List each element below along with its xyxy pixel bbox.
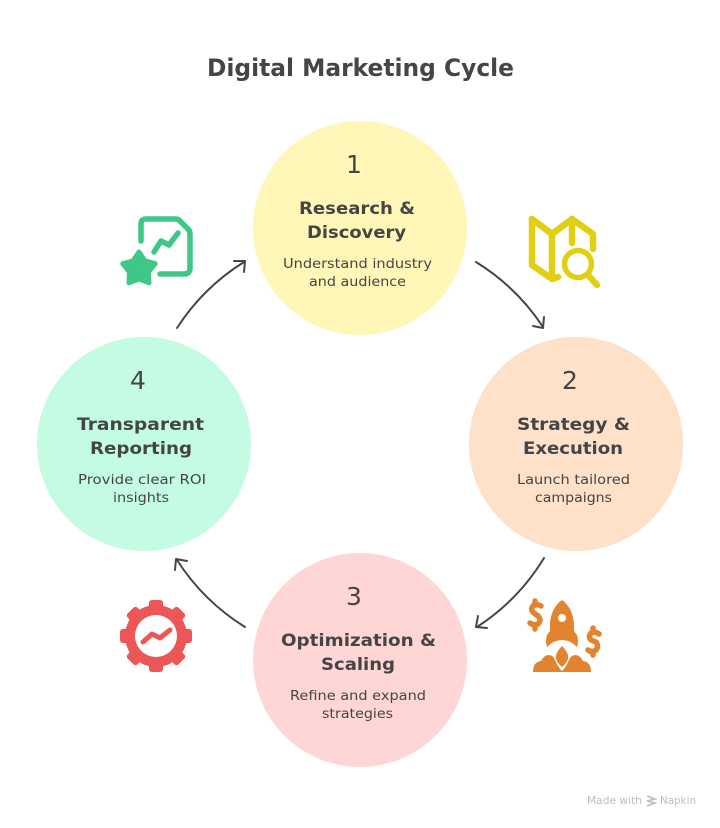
panel: step 4 transparent reporting: Transparent <box>77 415 204 435</box>
arrow: step 1 to step 2 <box>476 262 544 328</box>
panel: step 2 strategy and execution: campaigns <box>535 491 612 506</box>
icon: rocket with dollars <box>530 600 599 672</box>
icon: report with star <box>123 219 190 283</box>
footer: made with napkin: Napkin <box>660 794 696 807</box>
panel: step 2 strategy and execution: 2 <box>562 366 578 395</box>
arrow: step 2 to step 3 <box>476 558 544 628</box>
panel: step 3 optimization and scaling: Optimization & <box>281 631 436 651</box>
title: Digital Marketing Cycle <box>207 54 514 82</box>
panel: step 2 strategy and execution: Execution <box>523 439 623 459</box>
footer: made with napkin: Made with <box>587 794 642 807</box>
arrow: step 3 to step 4 <box>175 559 245 627</box>
arrow: step 4 to step 1 <box>177 261 245 328</box>
panel: step 2 strategy and execution <box>469 337 683 551</box>
panel: step 4 transparent reporting: Provide clear ROI <box>78 473 206 488</box>
panel: step 3 optimization and scaling <box>253 553 467 767</box>
panel: step 4 transparent reporting <box>37 337 251 551</box>
panel: step 1 research and discovery: 1 <box>346 150 362 179</box>
panel: step 3 optimization and scaling: Refine and expand <box>290 689 426 704</box>
panel: step 1 research and discovery: Research & <box>299 199 415 219</box>
panel: step 3 optimization and scaling: Scaling <box>321 655 395 675</box>
panel: step 4 transparent reporting: 4 <box>130 366 146 395</box>
footer: made with napkin <box>587 794 696 807</box>
panel: step 4 transparent reporting: insights <box>113 491 169 506</box>
icon: map with magnifier <box>532 219 597 285</box>
panel: step 3 optimization and scaling: strategies <box>322 707 393 722</box>
panel: step 1 research and discovery <box>253 121 467 335</box>
panel: step 2 strategy and execution: Launch tailored <box>517 473 630 488</box>
panel: step 2 strategy and execution: Strategy & <box>517 415 630 435</box>
panel: step 1 research and discovery: Understand industry <box>283 257 432 272</box>
panel: step 1 research and discovery: Discovery <box>307 223 406 243</box>
panel: step 1 research and discovery: and audience <box>309 275 406 290</box>
icon: gear with trend line <box>120 600 192 672</box>
panel: step 3 optimization and scaling: 3 <box>346 582 362 611</box>
panel: step 4 transparent reporting: Reporting <box>90 439 192 459</box>
